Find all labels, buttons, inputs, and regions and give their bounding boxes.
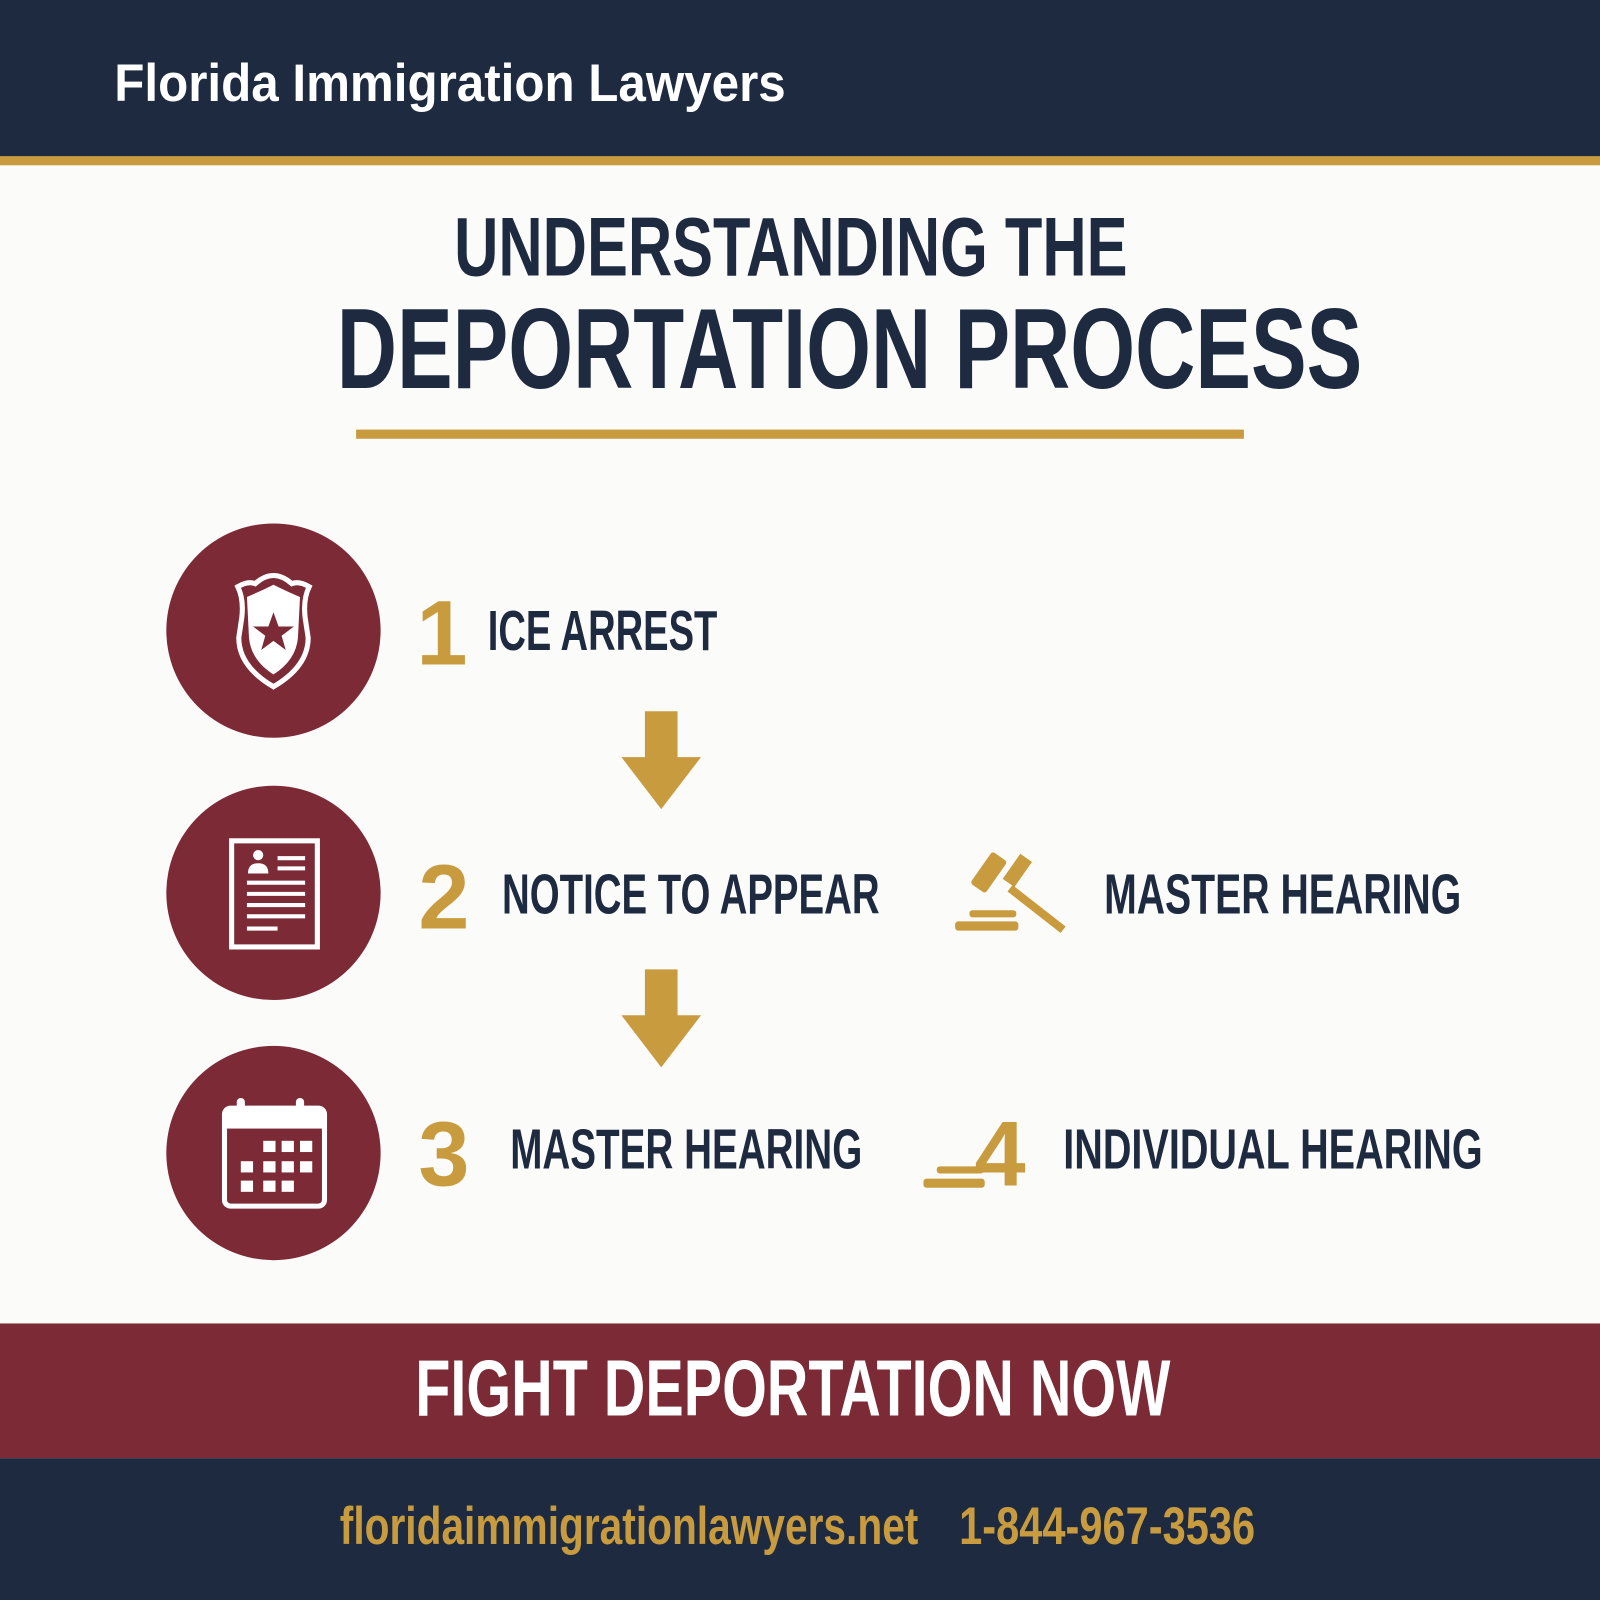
footer contact: floridaimmigrationlawyers.net [340,1497,919,1556]
title underline [356,430,1244,439]
icon: document [166,786,381,1000]
arrow 1 [621,711,701,809]
step 1: ICE arrest: 1 [416,582,467,684]
title [337,200,1362,413]
title: UNDERSTANDING THE [454,200,1128,294]
gavel icon with master hearing: MASTER HEARING [1104,862,1461,925]
step 2: notice to appear: NOTICE TO APPEAR [502,862,880,925]
gavel icon with master hearing [955,851,1461,933]
footer contact: 1-844-967-3536 [959,1497,1255,1556]
step 2: notice to appear: 2 [418,847,469,949]
step 3: master hearing: 3 [418,1104,469,1206]
call to action band [0,1323,1600,1458]
step 1: ICE arrest: ICE ARREST [488,599,717,662]
step 2: notice to appear [166,786,880,1000]
icon: calendar [166,1046,381,1260]
arrow 2 [621,969,701,1067]
footer contact [0,1458,1600,1600]
header text: Florida Immigration Lawyers [114,54,786,113]
call to action band: FIGHT DEPORTATION NOW [415,1343,1171,1432]
step 1: ICE arrest [166,523,717,738]
step 4: individual hearing [923,1104,1483,1206]
step 4: individual hearing: 4 [974,1104,1026,1206]
header bar [0,0,1600,165]
step 3: master hearing [166,1046,862,1260]
icon: badge [166,523,381,738]
step 3: master hearing: MASTER HEARING [510,1117,862,1180]
